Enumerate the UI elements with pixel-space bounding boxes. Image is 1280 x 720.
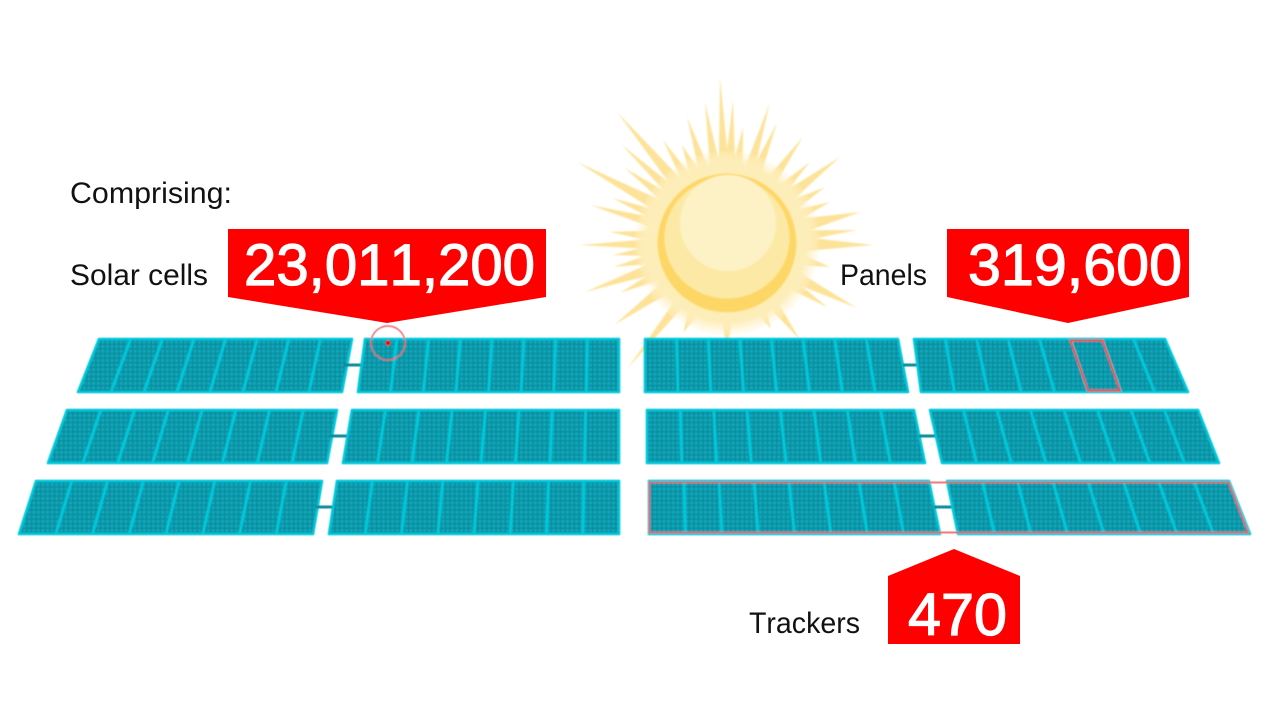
highlight: one tracker outline — [650, 482, 1248, 532]
text: trackers label: Trackers — [749, 607, 860, 640]
solar arrays — [19, 326, 1250, 534]
highlight: one panel outline — [1070, 340, 1120, 390]
sun outer ring — [658, 174, 796, 312]
text: panels label: Panels — [840, 259, 927, 292]
tracker: left row 3 — [19, 481, 619, 534]
highlight: solar cell marker — [371, 326, 405, 360]
callout: trackers: 470 — [908, 582, 1007, 648]
text: solar cells label: Solar cells — [70, 259, 208, 292]
tracker: left row 2 — [48, 410, 619, 463]
callout: trackers — [888, 549, 1020, 648]
sun highlight — [680, 175, 776, 271]
tracker: right row 2 — [647, 410, 1219, 463]
sun body — [664, 178, 790, 298]
sun rays — [575, 77, 873, 371]
callout: panels — [947, 229, 1189, 323]
callout: solar cells — [228, 229, 546, 323]
tracker: right row 3 — [649, 481, 1250, 534]
tracker: right row 1 — [645, 339, 1188, 392]
callout: panels: 319,600 — [968, 233, 1182, 298]
icon: sun — [575, 77, 873, 371]
callout: solar cells: 23,011,200 — [244, 233, 535, 298]
sun halo — [635, 151, 819, 335]
tracker: left row 1 — [78, 339, 619, 392]
text: comprising: Comprising: — [70, 177, 232, 210]
